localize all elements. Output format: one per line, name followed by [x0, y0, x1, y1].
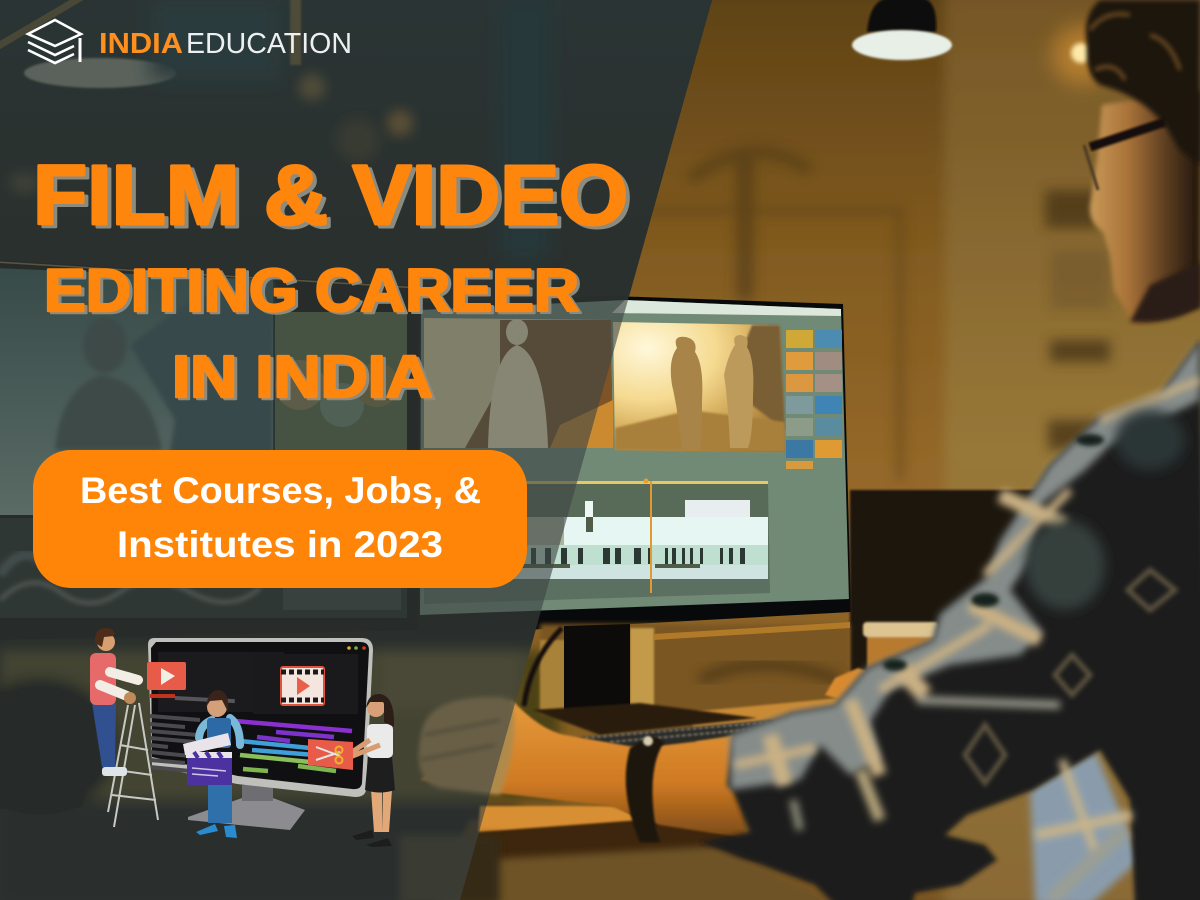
blurred shelf	[640, 150, 900, 480]
back wall under monitor	[524, 622, 850, 714]
character: girl with clapperboard	[183, 690, 240, 838]
muted patch on back	[1025, 520, 1105, 610]
subtitle text: Institutes in 2023	[117, 524, 443, 565]
desk	[400, 697, 870, 900]
character: girl with scissors	[308, 694, 395, 847]
title line 1 shadow and text: FILM & VIDEO	[37, 151, 632, 245]
title line 2 shadow and text: EDITING CAREER	[44, 257, 579, 324]
hand and forearm	[419, 668, 880, 842]
title line 2 shadow and text: EDITING CAREER	[47, 259, 582, 326]
arms	[350, 740, 380, 757]
left-room desk surface	[0, 650, 560, 900]
progress bar	[150, 694, 175, 698]
video panels	[158, 652, 284, 712]
legs	[371, 790, 392, 832]
icon: film strip play	[281, 667, 324, 705]
title line 1 shadow and text: FILM & VIDEO	[33, 148, 628, 242]
plaid light band	[730, 340, 1200, 790]
head and hair	[367, 699, 385, 717]
timeline bars	[235, 721, 352, 771]
window buttons	[347, 646, 351, 650]
wall frames	[1045, 190, 1110, 450]
title line 3 shadow and text: IN INDIA	[172, 344, 433, 410]
plaid tan stripes	[735, 380, 1200, 830]
shirt	[90, 653, 116, 705]
main monitor	[418, 296, 851, 636]
shoes	[196, 824, 237, 838]
left preview	[424, 318, 613, 448]
logo wordmark: INDIA	[99, 28, 183, 60]
clip stripes	[531, 548, 745, 564]
left monitor lower strip	[0, 518, 407, 618]
monitor stand	[564, 624, 630, 714]
skirt	[365, 757, 395, 792]
shoes	[352, 830, 392, 847]
illustration monitor	[148, 638, 373, 830]
torso and sleeve	[700, 340, 1200, 900]
head and hair	[207, 697, 227, 717]
illustration: team editing video on monitor	[90, 628, 395, 847]
shoes	[102, 767, 127, 776]
arms	[199, 718, 240, 745]
brand logo	[28, 20, 352, 63]
left monitor side panel	[275, 312, 407, 517]
ladder	[108, 703, 158, 827]
pendant lamp	[852, 0, 952, 60]
rock in left preview	[130, 280, 273, 515]
brand logo: EDUCATION	[186, 28, 352, 60]
main preview	[613, 322, 785, 452]
diamonds	[965, 570, 1175, 783]
title	[33, 148, 632, 412]
editor head and glasses	[1084, 0, 1200, 326]
left room lamp and bokeh	[0, 0, 550, 260]
wall light glow	[1052, 25, 1112, 85]
coffee cup	[863, 622, 939, 674]
thumbnails	[786, 330, 842, 469]
dark left room	[0, 0, 712, 900]
icon: scissors tile	[308, 739, 353, 770]
left monitor	[0, 260, 420, 640]
callout: subtitle pill	[33, 450, 527, 588]
dark speaker box	[850, 490, 1040, 700]
subtitle text: Best Courses, Jobs, &	[80, 470, 481, 511]
dark checks on sleeve	[883, 434, 1104, 671]
astronaut in left preview	[55, 317, 162, 450]
shirt	[367, 724, 393, 758]
icon: stacked books with tassel	[28, 20, 81, 63]
text lines	[150, 716, 200, 771]
timeline	[424, 482, 770, 604]
monitor base and keyboard	[533, 703, 800, 750]
legs	[208, 785, 232, 823]
arms	[100, 672, 138, 696]
overalls	[207, 718, 231, 748]
dark diagonal overlay panel	[0, 0, 712, 900]
shirt tail	[1030, 750, 1140, 900]
subtitle text	[80, 470, 481, 565]
plaid shirt	[700, 340, 1200, 900]
character: man on ladder	[90, 628, 186, 827]
plaid tail stripes	[1036, 760, 1132, 900]
icon: play tile	[147, 662, 186, 690]
icon: clapperboard	[183, 733, 232, 785]
head and hair	[97, 633, 115, 651]
title line 3 shadow and text: IN INDIA	[175, 346, 436, 412]
jeans	[92, 703, 116, 767]
